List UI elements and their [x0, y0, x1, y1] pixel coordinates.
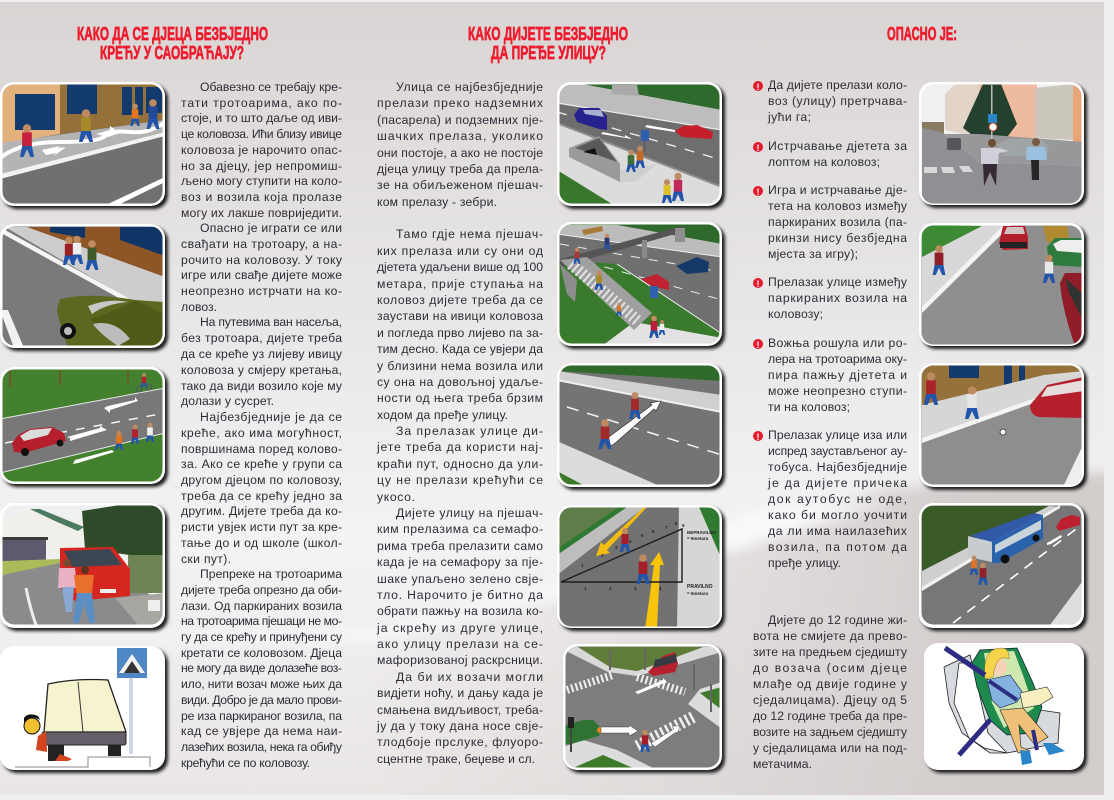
- text: middle column paragraphs: они постоје, а ако не постоје: [377, 146, 543, 160]
- diagram: correct and incorrect crossing distance: 8: [675, 521, 678, 526]
- text: dangerous situations list: док аутобус не оде,: [768, 492, 907, 506]
- diagram: correct and incorrect crossing distance: PRAVILNO: [687, 584, 713, 590]
- text: dangerous situations list: паркираних возила на: [768, 291, 907, 305]
- text: left column paragraphs: но за дјецу, јер непромиш-: [181, 159, 342, 173]
- title: right column: ОПАСНО ЈЕ:: [887, 24, 957, 44]
- photo: underpass crossing: [557, 82, 725, 209]
- text: left column paragraphs: дијете треба опрезно да оби-: [181, 583, 342, 597]
- text: dangerous situations list: ркинзи нису безбједна: [768, 231, 907, 245]
- drawing: child peeking from behind a parked van: [0, 646, 168, 773]
- diagram: correct and incorrect crossing distance: 2: [601, 553, 604, 558]
- diagram: correct and incorrect crossing distance: 3: [634, 586, 637, 591]
- diagram: correct and incorrect crossing distance: 1: [584, 586, 587, 591]
- text: dangerous situations list: пређе улицу.: [768, 556, 841, 570]
- diagram: correct and incorrect crossing distance: 3: [615, 545, 618, 550]
- text: dangerous situations list: тобуса. Најбезбједније: [768, 460, 907, 474]
- text: middle column paragraphs: Дијете улицу на пјешач-: [396, 506, 543, 520]
- photo: children running across street: [919, 82, 1087, 208]
- title: left column: КРЕЋУ У САОБРАЋАЈУ?: [100, 43, 244, 63]
- diagram: correct and incorrect crossing distance: 4: [659, 586, 662, 591]
- text: left column paragraphs: воз и возила која пролазе: [181, 190, 342, 204]
- text: dangerous situations list: Вожња рошула или ро-: [768, 336, 907, 350]
- text: left column paragraphs: Препреке на тротоарима: [200, 567, 342, 581]
- text: middle column paragraphs: [376, 80, 543, 766]
- text: middle column paragraphs: ким прелазима са семафо-: [377, 522, 543, 536]
- text: child seat advice: Дијете до 12 године жи-: [768, 613, 907, 627]
- text: left column paragraphs: без тротоара, дијете треба: [181, 331, 342, 345]
- text: dangerous situations list: возила, па потом да: [768, 540, 907, 554]
- title: middle column: ДА ПРЕЂЕ УЛИЦУ?: [491, 43, 606, 63]
- text: middle column paragraphs: тло. Нарочито је битно да: [377, 588, 543, 602]
- text: dangerous situations list: ти на коловоз;: [768, 400, 850, 414]
- text: left column paragraphs: ило, нити возач може њих да: [181, 677, 342, 691]
- diagram: correct and incorrect crossing distance: = 5metara: [687, 591, 709, 596]
- text: middle column paragraphs: укосо.: [377, 490, 415, 504]
- text: child seat advice: возите на задњем сједишту: [753, 725, 908, 739]
- photo: child running between parked cars: [919, 223, 1087, 349]
- text: middle column paragraphs: Тамо гдје нема пјешач-: [396, 227, 543, 241]
- text: left column paragraphs: коловоза је нарочито опас-: [181, 143, 342, 157]
- text: middle column paragraphs: заустави на ивици коловоза: [377, 309, 543, 323]
- text: dangerous situations list: испред заустављеног ау-: [768, 444, 907, 458]
- text: child seat advice: у сједалицама или на под-: [753, 741, 907, 755]
- diagram: correct and incorrect crossing distance: 7: [665, 525, 668, 530]
- text: middle column paragraphs: тлодбоје прслуке, флуоро-: [377, 735, 543, 749]
- text: left column paragraphs: долази у сусрет.: [181, 394, 274, 408]
- text: dangerous situations list: Истрчавање дјетета за: [768, 139, 907, 153]
- text: dangerous situations list: је да дијете причека: [767, 476, 907, 490]
- diagram: correct and incorrect crossing distance: NEPRAVILNO: [687, 530, 717, 535]
- text: left column paragraphs: кретати се коловозом. Дјеца: [181, 646, 342, 660]
- diagram: correct and incorrect crossing distance: 9: [682, 523, 685, 528]
- text: dangerous situations list: лоптом на коловоз;: [768, 155, 880, 169]
- text: left column paragraphs: лази. Од паркираних возила: [181, 599, 342, 613]
- text: dangerous situations list: коловозу;: [768, 307, 823, 321]
- text: middle column paragraphs: ја скрећу из друге улице,: [376, 621, 543, 635]
- text: left column paragraphs: тако да види возило које му: [181, 379, 343, 393]
- text: dangerous situations list: може неопрезно ступи-: [768, 384, 907, 398]
- text: middle column paragraphs: коловоз дијете треба да се: [377, 293, 543, 307]
- photo: children walking along country road: [0, 367, 168, 487]
- text: middle column paragraphs: мафоризованој раскрсници.: [377, 653, 543, 667]
- text: middle column paragraphs: Да би их возачи могли: [396, 670, 543, 684]
- text: middle column paragraphs: ких прелаза или су они од: [377, 244, 543, 258]
- text: left column paragraphs: Обавезно се требају кре-: [200, 80, 342, 94]
- text: dangerous situations list: како би могло уочити: [768, 508, 907, 522]
- text: middle column paragraphs: и погледа прво лијево па за-: [377, 326, 543, 340]
- icon: warning bullets: !: [756, 143, 760, 153]
- text: left column paragraphs: за. Ако се креће у групи са: [181, 457, 342, 471]
- title: middle column: [468, 24, 628, 63]
- diagram: correct and incorrect crossing distance: 1: [581, 563, 584, 568]
- text: left column paragraphs: стоје, и то што даље од иви-: [181, 111, 342, 125]
- text: dangerous situations list: воз (улицу) претрчава-: [768, 94, 907, 108]
- diagram: correct and incorrect crossing distance: 4: [629, 539, 632, 544]
- text: dangerous situations list: тета на коловоз између: [768, 199, 908, 213]
- text: child seat advice: [753, 613, 908, 771]
- text: left column paragraphs: ре иза паркираног возила, па: [181, 709, 342, 723]
- text: left column paragraphs: да се креће уз лијеву ивицу: [181, 347, 343, 361]
- text: left column paragraphs: види. Добро је да мало прови-: [181, 693, 342, 707]
- text: middle column paragraphs: јете треба да користи нај-: [376, 440, 543, 454]
- diagram: correct and incorrect crossing distance: 6: [652, 529, 655, 534]
- text: middle column paragraphs: видјети ноћу, и дању када је: [377, 686, 543, 700]
- text: left column paragraphs: На путевима ван насеља,: [200, 315, 342, 329]
- diagram: correct and incorrect crossing distance: = 9metara: [687, 536, 709, 541]
- text: child seat advice: млађе од двије године у: [753, 677, 908, 691]
- text: middle column paragraphs: ако улицу прелази на се-: [377, 637, 543, 651]
- text: left column paragraphs: це коловоза. Ићи близу ивице: [181, 127, 342, 141]
- text: left column paragraphs: кад се увјере да нема наи-: [181, 724, 342, 738]
- photo: children quarrelling on pavement near a green car: [0, 224, 168, 351]
- text: dangerous situations list: Да дијете прелази коло-: [768, 78, 907, 92]
- text: left column paragraphs: ски пут).: [181, 552, 231, 566]
- text: dangerous situations list: паркираних возила (па-: [768, 215, 907, 229]
- text: dangerous situations list: мјеста за игру);: [768, 247, 858, 261]
- text: dangerous situations list: Игра и истрчавање дје-: [768, 183, 907, 197]
- text: left column paragraphs: ристи увјек исти пут за кре-: [181, 520, 342, 534]
- text: middle column paragraphs: ходом да пређе улицу.: [377, 408, 508, 422]
- icon: warning bullets: !: [756, 187, 760, 197]
- text: middle column paragraphs: Улица се најбезбједније: [396, 80, 543, 94]
- text: dangerous situations list: лера на тротоарима оку-: [768, 352, 907, 366]
- text: left column paragraphs: неопрезно истрчати на ко-: [181, 284, 342, 298]
- text: left column paragraphs: тање до и од школе (школ-: [181, 536, 342, 550]
- text: middle column paragraphs: у близини нема возила или: [377, 359, 543, 373]
- text: left column paragraphs: креће, ако има могућност,: [181, 426, 342, 440]
- text: middle column paragraphs: прелази преко надземних: [377, 96, 543, 110]
- photo: children crossing in front of bus: [919, 503, 1087, 631]
- text: left column paragraphs: могу их лакше повриједити.: [181, 206, 342, 220]
- text: dangerous situations list: пира пажњу дјетета и: [768, 368, 907, 382]
- text: left column paragraphs: гу да се крећу и принуђени су: [181, 630, 343, 644]
- text: middle column paragraphs: обрати пажњу на возила ко-: [377, 604, 543, 618]
- text: left column paragraphs: на тротоарима пјешаци не мо-: [181, 614, 342, 628]
- drawing: child in car safety seat: [924, 643, 1087, 773]
- photo: signalised crossroads: [563, 644, 725, 773]
- text: middle column paragraphs: дјеца улицу треба да прела-: [377, 162, 543, 176]
- text: child seat advice: метачима.: [753, 757, 812, 771]
- text: left column paragraphs: лазећих возила, нека га обиђу: [181, 740, 343, 754]
- text: left column paragraphs: коловоза у смјеру кретања,: [181, 363, 342, 377]
- diagram: correct and incorrect crossing distance: 5: [641, 533, 644, 538]
- text: left column paragraphs: површинама поред коловo-: [181, 442, 342, 456]
- icon: warning bullets: !: [756, 279, 760, 289]
- icon: warning bullets: !: [756, 82, 760, 92]
- text: middle column paragraphs: ју да у току дана носе свје-: [376, 719, 543, 733]
- text: middle column paragraphs: тим десно. Када се увјери да: [377, 342, 543, 356]
- text: left column paragraphs: рочито на коловозу. У току: [181, 253, 343, 267]
- text: left column paragraphs: треба да се крећу једно за: [181, 489, 342, 503]
- text: middle column paragraphs: За прелазак улице ди-: [396, 424, 543, 438]
- text: left column paragraphs: Опасно је играти се или: [200, 221, 342, 235]
- text: left column paragraphs: ловоз.: [181, 300, 217, 314]
- text: middle column paragraphs: метара, прије ступања на: [377, 277, 543, 291]
- text: dangerous situations list: [767, 78, 908, 570]
- text: middle column paragraphs: рима треба прелазити само: [377, 539, 543, 553]
- photo: girls walking past a van parked on pavement: [0, 503, 168, 631]
- photo: children walking on pavement: [0, 82, 168, 209]
- text: child seat advice: вота не смијете да прево-: [753, 629, 907, 643]
- text: middle column paragraphs: (пасарела) и подземних пје-: [377, 113, 543, 127]
- diagram: correct and incorrect crossing distance: [557, 505, 725, 631]
- text: left column paragraphs: другим. Дијете треба да ко-: [181, 504, 342, 518]
- photo: pedestrian overpass: [557, 222, 725, 349]
- text: middle column paragraphs: краћи пут, односно да ули-: [377, 457, 543, 471]
- text: dangerous situations list: јући га;: [767, 110, 811, 124]
- text: dangerous situations list: да ли има наилазећих: [768, 524, 907, 538]
- text: middle column paragraphs: сцентне траке, беџеве и сл.: [377, 752, 535, 766]
- text: middle column paragraphs: смањена видљивост, треба-: [377, 703, 543, 717]
- title: left column: КАКО ДА СЕ ДЈЕЦА БЕЗБЈЕДНО: [77, 24, 268, 44]
- text: left column paragraphs: свађати на тротоару, а на-: [181, 237, 342, 251]
- text: middle column paragraphs: су она на довољној удаље-: [377, 375, 543, 389]
- text: middle column paragraphs: ком прелазу - зебри.: [377, 195, 497, 209]
- text: left column paragraphs: крећући се по коловозу.: [181, 756, 310, 770]
- text: middle column paragraphs: шаке упаљено зелено свје-: [377, 572, 543, 586]
- text: child seat advice: до 12 године треба да пре-: [753, 709, 907, 723]
- icon: warning bullets: !: [756, 340, 760, 350]
- text: child seat advice: сједалицама). Дјецу од 5: [753, 693, 907, 707]
- text: left column paragraphs: [181, 80, 343, 770]
- icon: warning bullets: !: [756, 432, 760, 442]
- photo: child running after ball: [919, 363, 1087, 490]
- text: dangerous situations list: Прелазак улице иза или: [768, 428, 907, 442]
- text: left column paragraphs: не могу да виде долазеће воз-: [181, 661, 342, 675]
- text: child seat advice: до возача (осим дјеце: [753, 661, 907, 675]
- text: left column paragraphs: игре или свађе дијете може: [181, 268, 342, 282]
- text: left column paragraphs: љено могу ступити на коло-: [181, 174, 342, 188]
- text: left column paragraphs: Најбезбједније је да се: [200, 410, 342, 424]
- text: middle column paragraphs: шачких прелаза, уколико: [377, 129, 543, 143]
- text: dangerous situations list: Прелазак улице између: [768, 275, 908, 289]
- text: child seat advice: зите на предњем сједишту: [753, 645, 908, 659]
- text: middle column paragraphs: зе на обиљеженом пјешач-: [377, 178, 543, 192]
- title: left column: [77, 24, 268, 63]
- photo: crossing the street straight vs diagonally: [557, 363, 725, 490]
- text: middle column paragraphs: када је на семафору за пје-: [377, 555, 543, 569]
- icon: warning bullets: [753, 81, 763, 442]
- text: middle column paragraphs: ности од њега треба брзим: [377, 391, 543, 405]
- text: left column paragraphs: тати тротоарима, ако по-: [181, 96, 342, 110]
- text: middle column paragraphs: дјетета удаљени више од 100: [377, 260, 543, 274]
- diagram: correct and incorrect crossing distance: 2: [609, 586, 612, 591]
- title: middle column: КАКО ДИЈЕТЕ БЕЗБЈЕДНО: [468, 24, 628, 44]
- text: middle column paragraphs: цу не прелази крећући се: [377, 473, 543, 487]
- text: left column paragraphs: другом дјецом по коловозу,: [181, 473, 342, 487]
